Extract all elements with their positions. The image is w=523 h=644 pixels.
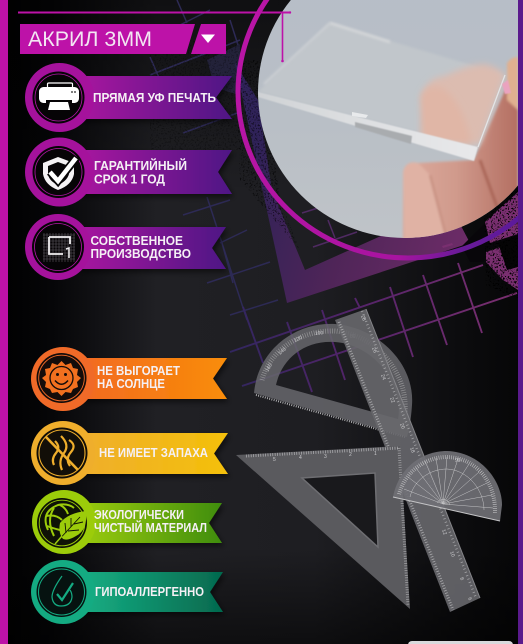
long ruler: 12 — [440, 529, 448, 536]
small protractor: 90 — [455, 458, 461, 464]
small protractor — [393, 451, 502, 521]
long ruler: 20 — [398, 423, 406, 430]
badge: eco material: ЧИСТЫЙ МАТЕРИАЛ — [94, 520, 207, 535]
label: НЕ ВЫГОРАЕТ — [97, 364, 180, 378]
long ruler: 22 — [388, 397, 396, 404]
long ruler — [335, 309, 480, 612]
badge: warranty — [25, 138, 232, 206]
badge: own production — [25, 214, 226, 280]
purple square frame — [235, 63, 470, 303]
photo: acrylic sheet in hand — [250, 0, 518, 250]
large protractor: 120 — [293, 335, 304, 344]
long ruler: 18 — [408, 447, 416, 454]
label: ГАРАНТИЙНЫЙ — [94, 158, 187, 173]
label: ЭКОЛОГИЧЕСКИ — [94, 508, 184, 522]
long ruler: 6 — [466, 597, 473, 602]
set square triangle: 5 — [273, 457, 276, 463]
large protractor: 160 — [265, 363, 274, 373]
icon: sheet with size mark — [43, 233, 75, 262]
left magenta bar — [0, 0, 8, 644]
icon: down arrow — [201, 34, 215, 43]
icon: smiling sun — [42, 361, 81, 396]
white card at bottom edge — [408, 641, 513, 644]
large protractor: 140 — [277, 346, 288, 357]
badge: hypoallergenic — [31, 560, 223, 624]
long ruler: 26 — [370, 347, 378, 354]
right purple bar — [518, 0, 523, 644]
long ruler: 24 — [379, 374, 387, 381]
grid lines lower right — [230, 263, 517, 392]
large protractor — [254, 324, 412, 437]
label: СОБСТВЕННОЕ — [90, 234, 183, 248]
inner grid strokes inside ring — [302, 208, 357, 247]
label: ГИПОАЛЛЕРГЕННО — [95, 585, 204, 599]
icon: drop with check — [52, 576, 73, 606]
badge: does not fade — [31, 347, 227, 411]
icon: globe and leaf — [46, 504, 86, 544]
title banner — [20, 24, 226, 54]
long ruler: 10 — [448, 551, 456, 558]
sheet front edge — [258, 92, 478, 161]
icon: shield with check — [43, 157, 77, 190]
set square triangle: 3 — [324, 454, 327, 460]
long ruler: 28 — [359, 315, 367, 322]
badge: eco material — [32, 490, 222, 554]
icon: crossed odour waves — [46, 436, 78, 470]
grunge area right — [442, 185, 518, 300]
title text: АКРИЛ 3ММ — [28, 28, 152, 51]
icon: printer — [39, 83, 79, 110]
hand below sheet — [403, 57, 518, 250]
grunge speckle left of ring — [236, 60, 300, 250]
rulers illustration — [236, 309, 502, 612]
acrylic sheet — [262, 26, 461, 124]
large protractor: 100 — [315, 330, 324, 337]
set square triangle: 1 — [374, 451, 377, 457]
set square triangle: 4 — [299, 455, 302, 461]
navy background grid — [150, 0, 278, 320]
badge: own production: ПРОИЗВОДСТВО — [90, 247, 191, 261]
badge: direct UV print — [25, 63, 232, 132]
badge: does not fade: НА СОЛНЦЕ — [97, 377, 165, 391]
label: ПРЯМАЯ УФ ПЕЧАТЬ — [93, 91, 216, 105]
badge: warranty: СРОК 1 ГОД — [94, 172, 165, 186]
set square triangle — [236, 446, 410, 609]
long ruler: 8 — [458, 577, 465, 582]
large protractor: 80 — [350, 334, 356, 340]
fingers seen through sheet — [422, 64, 505, 145]
faint speckle texture — [150, 40, 240, 150]
top line with crosshair — [18, 11, 291, 62]
set square triangle: 2 — [349, 452, 352, 458]
magenta ring around photo — [238, 0, 523, 258]
label: НЕ ИМЕЕТ ЗАПАХА — [99, 446, 208, 460]
badge: no odour — [31, 421, 228, 485]
